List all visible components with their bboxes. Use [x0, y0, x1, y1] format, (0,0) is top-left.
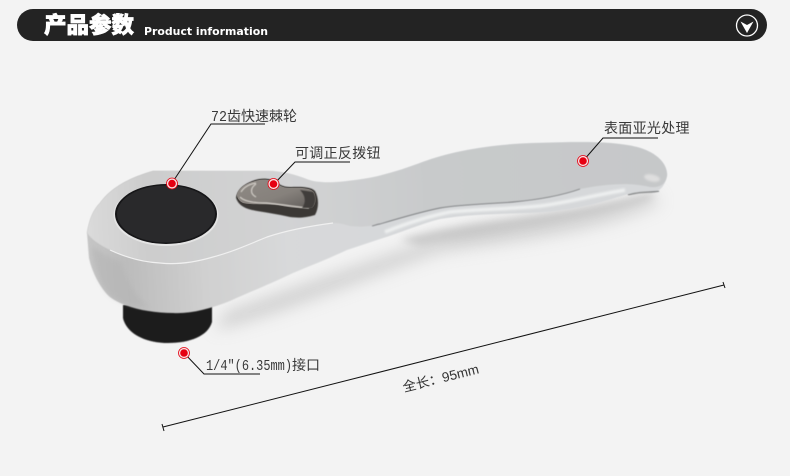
- label: 可调正反拨钮: [295, 143, 381, 163]
- title: English: Product information: [144, 25, 268, 38]
- title: Chinese: 产品参数: [44, 8, 134, 40]
- ratchet cap: [114, 184, 218, 246]
- marker: [166, 178, 178, 189]
- top face of head and handle: [87, 142, 667, 264]
- label: 72: [211, 109, 227, 126]
- header bar: [17, 8, 767, 41]
- near shadow: [400, 192, 655, 246]
- handle crease: [372, 189, 580, 226]
- label: 齿快速棘轮: [227, 106, 297, 126]
- body lower side: [87, 142, 667, 313]
- reversing lever: [236, 179, 318, 218]
- label: 表面亚光处理: [604, 118, 690, 138]
- marker: [268, 178, 279, 190]
- marker: [578, 156, 588, 166]
- icon: down arrow in circle: [736, 15, 758, 36]
- callout: reversing switch: [268, 143, 381, 190]
- dimension label: 全长：95mm: [401, 361, 480, 395]
- ratchet wrench photo: [87, 142, 667, 343]
- mottled side shade: [92, 246, 150, 308]
- handle end highlight: [643, 173, 661, 183]
- callout: 1/4 inch drive: [178, 348, 320, 375]
- label: 1/4"(6.35mm): [206, 358, 292, 375]
- callout: matte surface: [578, 118, 690, 166]
- square drive: [123, 300, 212, 343]
- dimension line: [162, 282, 725, 431]
- marker: [178, 348, 190, 358]
- label: 接口: [292, 355, 320, 375]
- shadow under handle: [215, 195, 660, 330]
- callout: 72 tooth ratchet: [166, 106, 297, 189]
